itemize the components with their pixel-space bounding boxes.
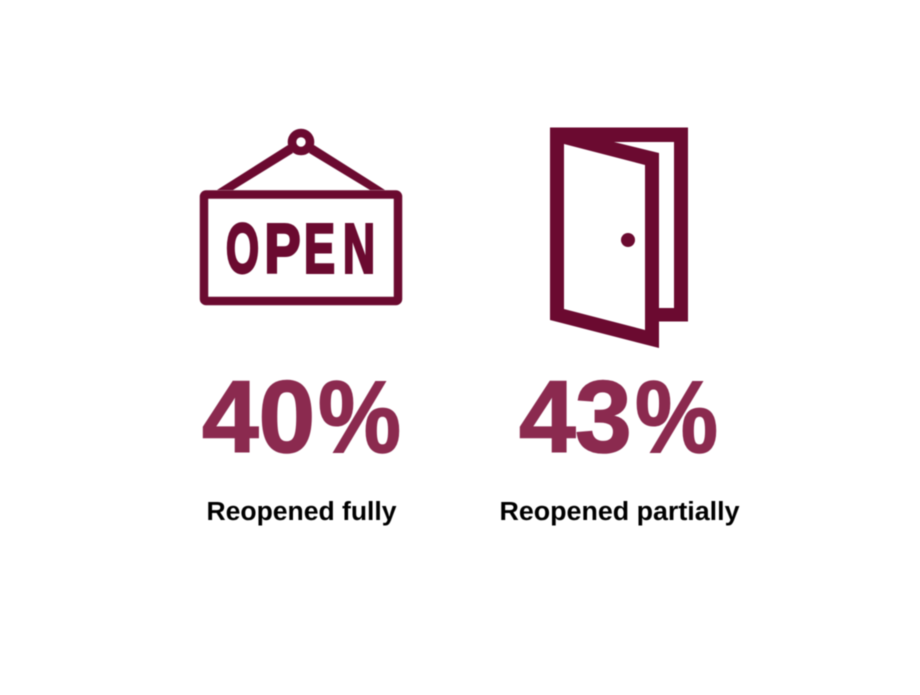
panel: reopened partially [500,128,740,526]
icon: open sign: O [226,210,259,288]
icon: open sign: N [343,210,375,288]
icon: open sign [204,133,398,301]
statistic: 43%: 3 [575,360,632,474]
statistic: 40%: 4 [202,360,259,474]
label: reopened partially: Reopened partially [500,498,740,526]
statistic: 40% [202,360,401,474]
statistic: 43%: 4 [519,360,576,474]
statistic: 43%: % [635,360,718,474]
icon: open door [550,128,688,348]
statistic: 40%: 0 [258,360,315,474]
label: reopened fully: Reopened fully [206,498,397,526]
statistic: 43% [519,360,718,474]
statistic: 40%: % [318,360,401,474]
panel: reopened fully [202,133,401,526]
icon: open sign: P [264,210,300,288]
icon: open sign: E [304,210,335,288]
